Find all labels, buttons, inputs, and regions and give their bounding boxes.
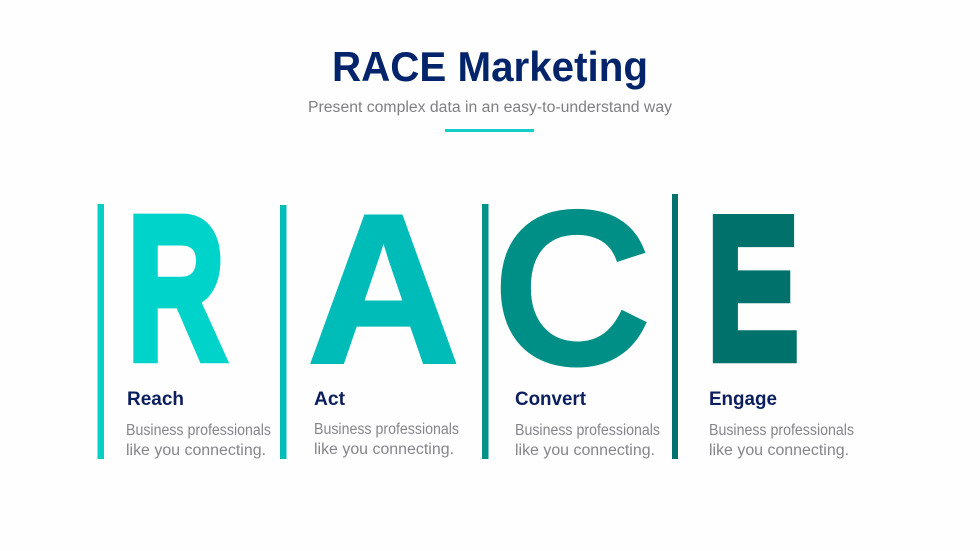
act divider bar — [280, 205, 286, 459]
panel: engage — [672, 182, 854, 459]
big letter R: R — [128, 181, 224, 395]
act heading: Act — [314, 389, 346, 410]
big letter C: C — [495, 170, 648, 405]
convert divider bar — [482, 204, 488, 459]
reach description: Business professionals — [126, 422, 271, 439]
panel: convert — [482, 170, 660, 459]
reach divider bar — [98, 204, 104, 459]
reach description: like you connecting. — [126, 442, 266, 459]
engage description: like you connecting. — [709, 442, 849, 459]
convert description: like you connecting. — [515, 442, 655, 459]
big letter E: E — [708, 182, 796, 395]
panel: act — [280, 171, 460, 459]
engage description: Business professionals — [709, 422, 854, 439]
title: RACE Marketing — [332, 43, 648, 90]
engage heading: Engage — [709, 389, 777, 410]
convert description: Business professionals — [515, 422, 660, 439]
subtitle: Present complex data in an easy-to-understand way — [308, 99, 672, 116]
panel: reach — [98, 181, 271, 459]
title underline — [445, 129, 534, 132]
engage divider bar — [672, 194, 678, 459]
act description: Business professionals — [314, 421, 459, 438]
act description: like you connecting. — [314, 441, 454, 458]
big letter A: A — [307, 171, 460, 409]
reach heading: Reach — [127, 389, 184, 410]
convert heading: Convert — [515, 389, 587, 410]
